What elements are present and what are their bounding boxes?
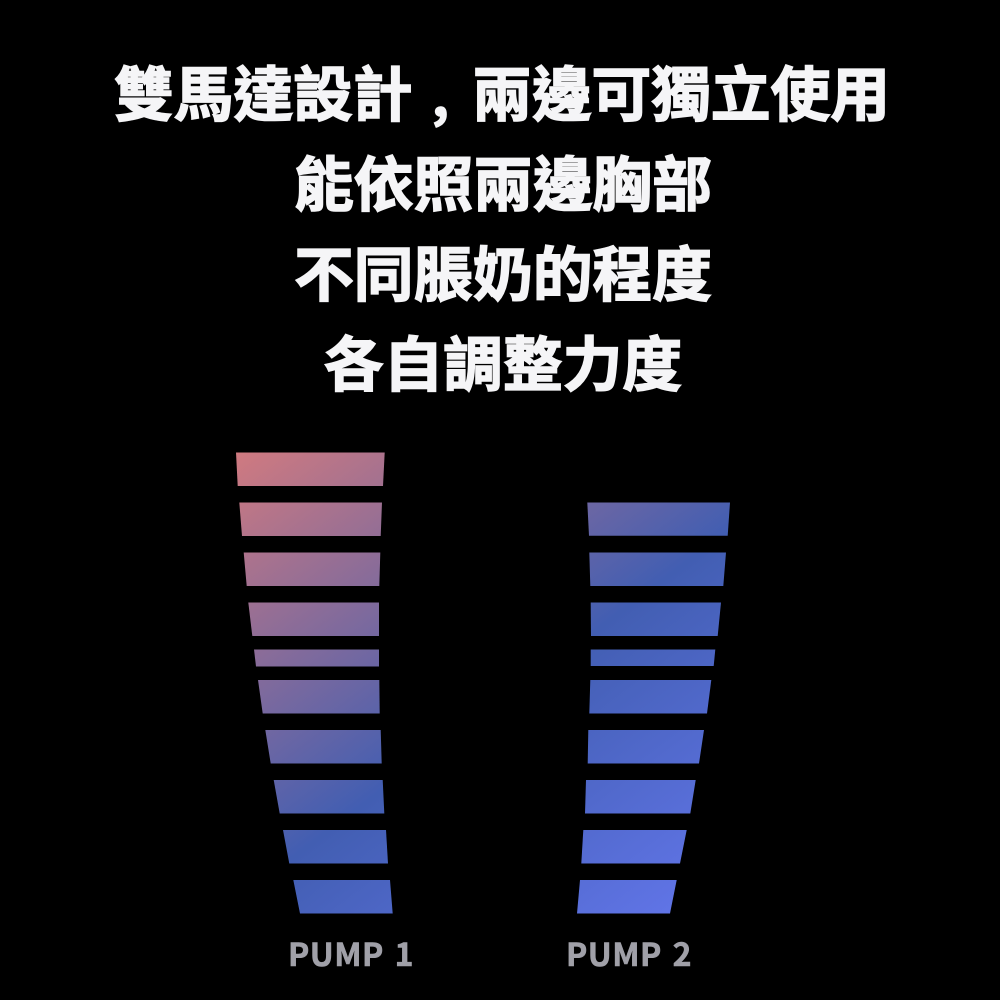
bar chart: pump 1 level bars <box>236 452 393 914</box>
title line 3: 不同脹奶的程度 <box>294 242 712 309</box>
title line 1: , <box>432 56 449 131</box>
label: pump 1: PUMP 1 <box>288 930 414 976</box>
bar chart: pump 2 level bars <box>577 502 730 914</box>
label: pump 2: PUMP 2 <box>566 930 692 976</box>
title line 1: 雙馬達設計 兩邊可獨立使用 <box>114 62 890 129</box>
title line 2: 能依照兩邊胸部 <box>294 152 712 219</box>
title line 4: 各自調整力度 <box>324 332 682 399</box>
